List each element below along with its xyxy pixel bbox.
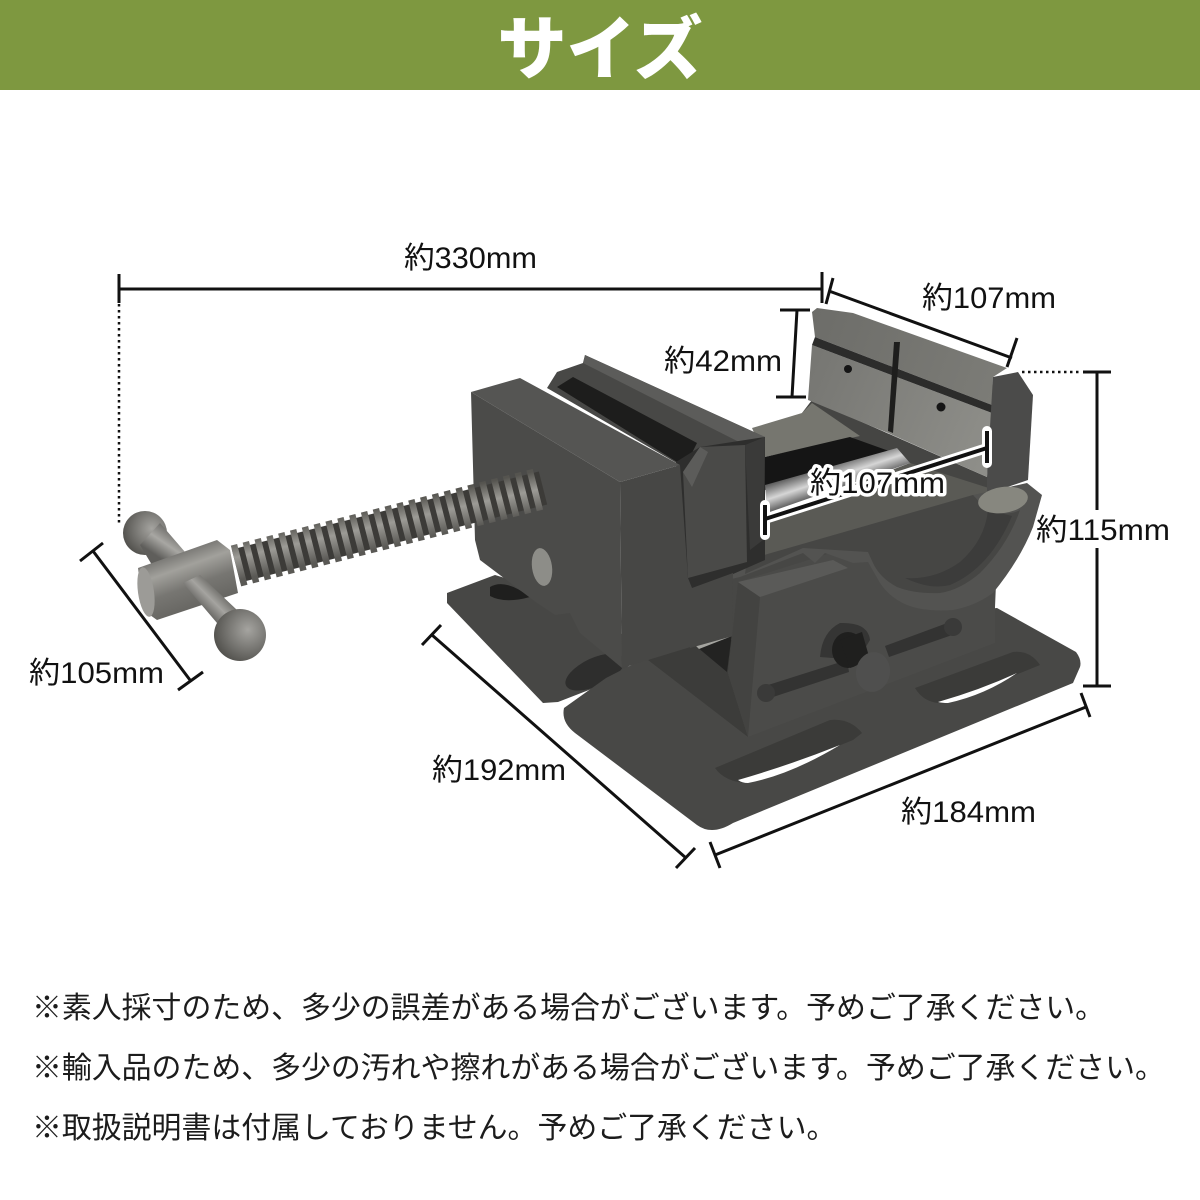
rear steel jaw plate	[808, 308, 1007, 477]
dimension: overall length 330mm	[119, 242, 822, 526]
slide top	[752, 403, 860, 457]
pocket	[557, 377, 697, 467]
moving jaw block	[471, 378, 765, 668]
pivot stud	[529, 547, 555, 587]
front base plate	[563, 608, 1080, 830]
dimension: base width 184mm: 約184mm	[901, 796, 1036, 829]
rear face	[471, 392, 622, 668]
rear base plate	[447, 575, 650, 703]
locking pin and knob	[757, 618, 962, 702]
slide dark strip behind jaw plate	[802, 400, 990, 497]
lower ball	[214, 609, 266, 661]
T-handle	[123, 511, 266, 661]
footnotes	[32, 983, 1165, 1147]
dimension: jaw depth 42mm	[664, 310, 810, 397]
dimension: jaw depth 42mm: 約42mm	[664, 345, 782, 378]
dark slide gap	[765, 437, 900, 490]
moving jaw rear casting	[547, 355, 765, 472]
handle bar upper	[140, 523, 185, 570]
lead screw thread	[236, 488, 543, 566]
title band	[0, 0, 1200, 90]
slide floor	[745, 463, 995, 562]
dimension: base depth 192mm: 約192mm	[432, 754, 566, 787]
trunnion support block	[728, 550, 997, 737]
weld bead	[976, 484, 1030, 516]
cradle with half-moon	[692, 483, 1042, 610]
dimension: base depth 192mm	[422, 625, 695, 868]
note 3: ※取扱説明書は付属しておりません。予めご了承ください。	[32, 1103, 836, 1147]
dimension: jaw width 107mm	[826, 278, 1082, 372]
jaw front	[683, 437, 765, 578]
vise photo	[123, 308, 1080, 830]
dimension: height 115mm	[1036, 372, 1170, 686]
top face	[471, 378, 680, 482]
dimension: jaw width 107mm: 約107mm	[922, 282, 1056, 315]
dimension: handle 105mm	[29, 543, 203, 690]
dimension: overall length 330mm: 約330mm	[404, 242, 537, 275]
upper ball	[123, 511, 167, 555]
collar	[138, 540, 238, 620]
horizontal groove	[812, 337, 992, 413]
dimension: jaw opening 107mm	[765, 431, 987, 535]
wedge shadow beneath moving jaw	[648, 631, 748, 737]
right mounting slot	[915, 652, 1040, 703]
note 1: ※素人採寸のため、多少の誤差がある場合がございます。予めご了承ください。	[32, 983, 1105, 1027]
front mounting slot	[715, 720, 862, 783]
upper band	[812, 308, 1007, 405]
lower panel	[808, 345, 992, 477]
dimension: jaw opening 107mm: 約107mm	[810, 467, 945, 500]
vertical groove	[888, 342, 900, 433]
note 2: ※輸入品のため、多少の汚れや擦れがある場合がございます。予めご了承ください。	[32, 1043, 1165, 1087]
front face	[620, 465, 733, 668]
rear jaw end casting	[987, 372, 1033, 494]
gap shadow between block and jaw	[676, 437, 765, 592]
cradle lower underlay	[690, 535, 880, 648]
dimension: height 115mm: 約115mm	[1036, 514, 1170, 547]
chrome slide rod	[765, 448, 910, 513]
handle bar lower	[183, 575, 237, 623]
dimension: handle 105mm: 約105mm	[29, 657, 164, 690]
dimension: base width 184mm	[710, 693, 1090, 868]
